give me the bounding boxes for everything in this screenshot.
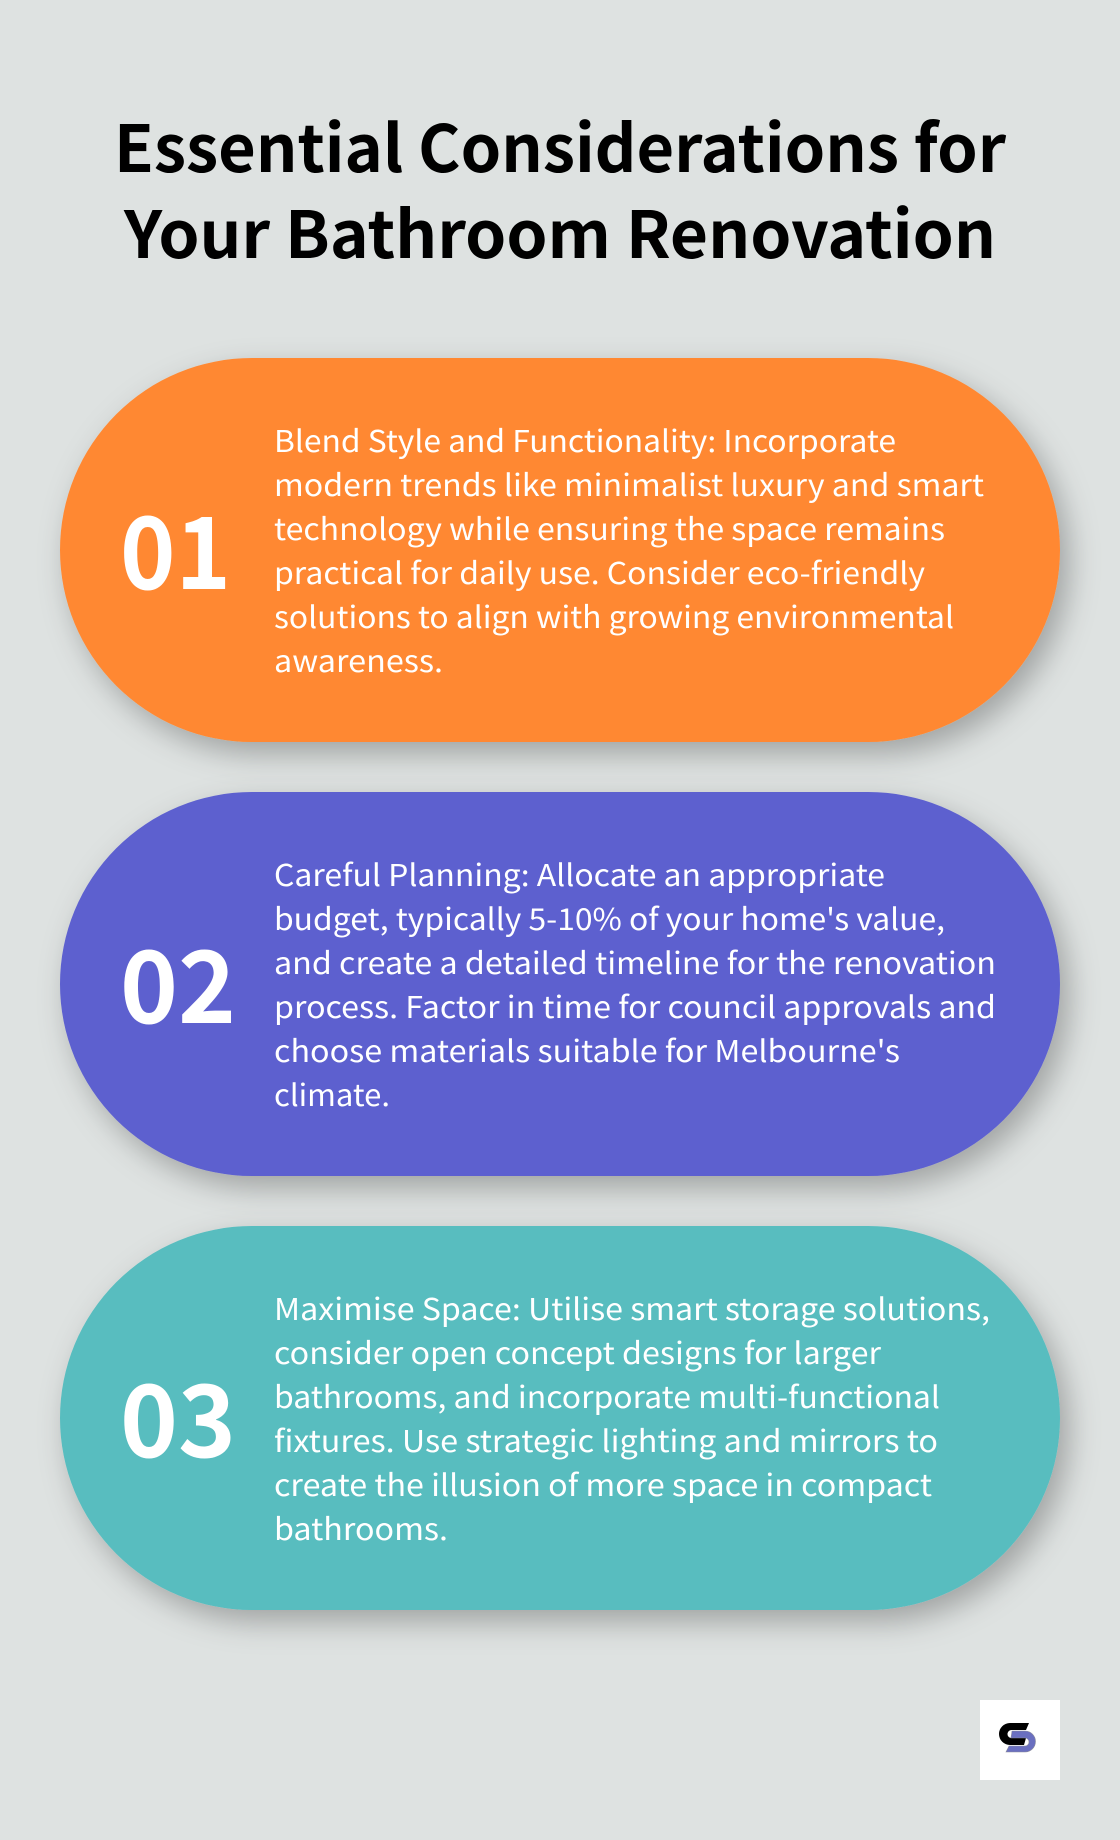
- number 03: 03: [120, 1341, 236, 1486]
- description 03: [274, 1285, 990, 1549]
- logo: black upper half: [999, 1723, 1029, 1745]
- description 03: bathrooms, and incorporate multi-functional: [274, 1373, 940, 1417]
- description 01: technology while ensuring the space remains: [274, 505, 945, 549]
- description 03: fixtures. Use strategic lighting and mirrors to: [274, 1417, 938, 1461]
- teal pill background: [60, 1226, 1060, 1610]
- logo: purple lower half: [1006, 1731, 1036, 1752]
- panel: 03 maximise space: [60, 1226, 1060, 1610]
- description 02: budget, typically 5-10% of your home's value,: [274, 895, 945, 939]
- description 02: Careful Planning: Allocate an appropriate: [274, 851, 885, 895]
- title: Essential Considerations for: [114, 97, 1007, 191]
- description 03: consider open concept designs for larger: [274, 1329, 881, 1373]
- title: Your Bathroom Renovation: [123, 183, 996, 277]
- number 02: 02: [120, 907, 236, 1052]
- orange pill background: [60, 358, 1060, 742]
- title: [114, 97, 1007, 277]
- description 02: [274, 851, 996, 1115]
- description 01: Blend Style and Functionality: Incorporate: [274, 417, 896, 461]
- description 02: and create a detailed timeline for the renovation: [274, 939, 996, 983]
- description 03: create the illusion of more space in compact: [274, 1461, 932, 1505]
- logo badge: [980, 1700, 1060, 1780]
- number 01: 01: [120, 473, 231, 618]
- description 01: solutions to align with growing environmental: [274, 593, 954, 637]
- description 02: process. Factor in time for council approvals and: [274, 983, 996, 1027]
- description 01: modern trends like minimalist luxury and smart: [274, 461, 984, 505]
- description 03: Maximise Space: Utilise smart storage solutions,: [274, 1285, 990, 1329]
- description 01: practical for daily use. Consider eco-friendly: [274, 549, 925, 593]
- description 01: [274, 417, 984, 681]
- description 03: bathrooms.: [274, 1505, 448, 1549]
- purple pill background: [60, 792, 1060, 1176]
- panel: 01 style and functionality: [60, 358, 1060, 742]
- panel: 02 careful planning: [60, 792, 1060, 1176]
- description 02: climate.: [274, 1071, 390, 1115]
- description 02: choose materials suitable for Melbourne's: [274, 1027, 900, 1071]
- description 01: awareness.: [274, 637, 443, 681]
